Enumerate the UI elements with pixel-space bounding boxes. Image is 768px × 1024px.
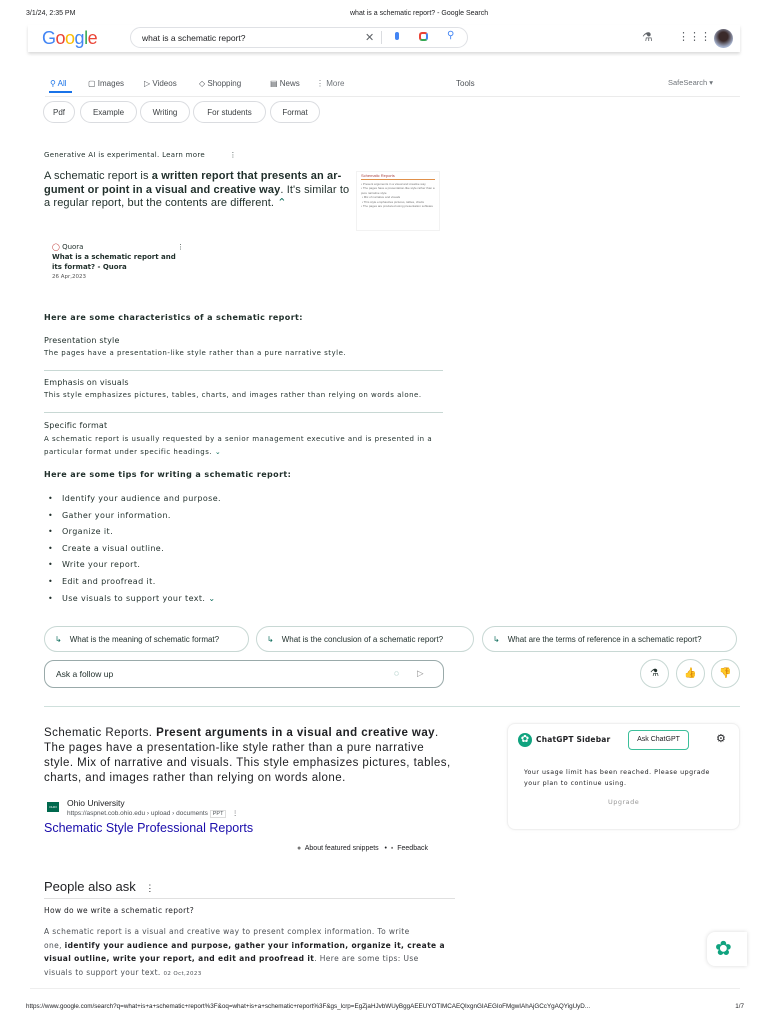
filter chips: For students xyxy=(207,108,252,116)
featured snippet text xyxy=(44,727,451,784)
thumbnail slide: • Mix of narrative and visuals xyxy=(362,195,400,199)
filter chips: Example xyxy=(93,108,124,116)
icons: labs, apps, avatar xyxy=(642,29,733,48)
AI overview summary: gument or point in a visual and creative way. It's similar to xyxy=(44,184,349,196)
characteristic: emphasis on visuals xyxy=(44,378,422,399)
featured snippet text: charts, and images rather than relying on words alone. xyxy=(44,772,346,784)
tips list: • Edit and proofread it. xyxy=(48,577,156,586)
print header xyxy=(26,10,488,17)
tabs: ⋮ More xyxy=(316,79,344,88)
filter chips: Format xyxy=(282,108,308,116)
answer xyxy=(44,927,445,976)
search box: ✕ xyxy=(365,32,374,44)
source card: quora: What is a schematic report and xyxy=(52,253,176,261)
search header bar xyxy=(28,25,740,52)
characteristic: presentation style xyxy=(44,336,346,357)
tips list: • Create a visual outline. xyxy=(48,544,164,553)
chatgpt sidebar panel: Your usage limit has been reached. Please upgrade xyxy=(524,769,710,776)
google logo: Google xyxy=(42,28,97,48)
print footer url: https://www.google.com/search?q=what+is+a+schematic+report%3F&oq=what+is+a+schematic+report%3F&gs_lcrp=EgZjaHJvbWUyBggAEEUYOTIMCAEQIxgnGIAEGIoFMgwIAhAjGCcYgAQYigUyD... xyxy=(26,1003,590,1010)
characteristic: specific format: Specific format xyxy=(44,421,107,430)
chatgpt sidebar panel: Ask ChatGPT xyxy=(637,736,680,743)
follow-up questions: What are the terms of reference in a schematic report? xyxy=(508,634,702,644)
characteristics heading: Here are some characteristics of a schematic report: xyxy=(44,313,303,322)
ask follow-up input xyxy=(44,660,444,688)
follow-up questions: ↳ xyxy=(493,634,500,644)
ask follow-up input: Ask a follow up xyxy=(56,669,113,679)
chatgpt sidebar panel: Upgrade xyxy=(608,798,639,806)
source: ohio university: OHIO xyxy=(49,805,57,809)
chatgpt sidebar panel: your plan to continue using. xyxy=(524,780,626,786)
thumbnail slide: Schematic Reports xyxy=(361,173,395,178)
characteristic: emphasis on visuals: Emphasis on visuals xyxy=(44,378,129,387)
characteristic: presentation style: The pages have a presentation-like style rather than a pure narrative style. xyxy=(44,349,346,357)
thumbnail slide: • The pages are produced using presentation software xyxy=(361,204,433,208)
answer: visuals to support your text. 02 Oct,2023 xyxy=(44,968,202,976)
tabs: ⚲ All xyxy=(50,79,67,88)
source card: quora: 26 Apr,2023 xyxy=(52,274,86,280)
characteristic: presentation style: Presentation style xyxy=(44,336,120,345)
chatgpt sidebar panel: ⚙ xyxy=(716,733,726,745)
tabs xyxy=(49,78,713,93)
characteristic: emphasis on visuals: This style emphasizes pictures, tables, charts, and images rather than relying on words alone. xyxy=(44,391,422,399)
tips list: • Use visuals to support your text. ⌄ xyxy=(48,594,215,603)
source: ohio university: https://aspnet.cob.ohio.edu › upload › documents PPT ⋮ xyxy=(67,810,238,817)
AI overview summary: A schematic report is a written report that presents an ar- xyxy=(44,170,341,182)
about featured snippets: ● About featured snippets • ▪ Feedback xyxy=(297,845,428,852)
thumbnail slide: • Present arguments in a visual and creative way xyxy=(361,182,426,186)
feedback buttons: 👍 xyxy=(684,668,697,679)
source: ohio university: Ohio University xyxy=(67,798,125,808)
tips list: • Write your report. xyxy=(48,560,140,569)
search box: ⚲ xyxy=(447,30,454,41)
AI overview summary xyxy=(44,170,349,209)
follow-up questions: ↳ xyxy=(55,634,62,644)
tabs: Tools xyxy=(456,79,475,88)
chatgpt sidebar panel: ChatGPT Sidebar xyxy=(536,735,610,744)
people also ask heading: People also ask ⋮ xyxy=(44,879,154,894)
source card: quora xyxy=(52,243,184,280)
feedback buttons: ⚗ xyxy=(650,668,659,679)
tabs: ◇ Shopping xyxy=(199,79,241,88)
source card: quora: ⋮ xyxy=(177,243,184,251)
source card: quora: ◯ Quora xyxy=(52,243,83,251)
chatgpt sidebar panel: ✿ xyxy=(521,734,529,745)
print header: what is a schematic report? - Google Search xyxy=(350,10,488,17)
tabs: ▢ Images xyxy=(88,79,124,88)
icons: labs, apps, avatar: ⋮⋮⋮ xyxy=(678,31,711,43)
print header: 3/1/24, 2:35 PM xyxy=(26,10,75,17)
characteristic: specific format: A schematic report is usually requested by a senior management executive and is presented in a xyxy=(44,435,432,443)
answer: visual outline, write your report, and edit and proofread it. Here are some tips: Use xyxy=(44,954,419,963)
floating chatgpt icon xyxy=(707,932,747,966)
featured snippet text: The pages have a presentation-like style rather than a pure narrative xyxy=(44,742,424,754)
tips list: • Organize it. xyxy=(48,527,113,536)
answer: one, identify your audience and purpose, gather your information, organize it, create a xyxy=(44,940,445,950)
follow-up questions xyxy=(44,626,737,652)
tips list xyxy=(48,494,221,603)
answer: A schematic report is a visual and creative way to present complex information. To write xyxy=(44,927,410,936)
ask follow-up input: ◌ xyxy=(394,668,399,678)
follow-up questions: What is the conclusion of a schematic report? xyxy=(282,634,443,644)
thumbnail slide: • The pages have a presentation-like style rather than a pure narrative style xyxy=(361,186,435,194)
characteristic: specific format xyxy=(44,421,432,456)
thumbnail slide xyxy=(356,171,440,231)
print footer url: 1/7 xyxy=(735,1003,744,1010)
chatgpt sidebar panel xyxy=(507,723,740,830)
source: ohio university xyxy=(44,798,253,835)
source: ohio university: Schematic Style Professional Reports xyxy=(44,821,253,835)
tips heading: Here are some tips for writing a schematic report: xyxy=(44,470,291,479)
search box xyxy=(130,27,468,48)
featured snippet text: style. Mix of narrative and visuals. This style emphasizes pictures, tables, xyxy=(44,757,451,769)
tips list: • Identify your audience and purpose. xyxy=(48,494,221,503)
filter chips: Writing xyxy=(153,108,177,116)
filter chips: Pdf xyxy=(53,108,65,116)
search box: what is a schematic report? xyxy=(142,33,245,43)
source card: quora: its format? - Quora xyxy=(52,263,127,271)
thumbnail slide: • This style emphasizes pictures, tables, charts xyxy=(362,200,424,204)
featured snippet text: Schematic Reports. Present arguments in a visual and creative way. xyxy=(44,727,439,739)
tabs: ▤ News xyxy=(270,79,300,88)
tips list: • Gather your information. xyxy=(48,511,171,520)
floating chatgpt icon: ✿ xyxy=(715,938,732,960)
characteristic: specific format: particular format under specific headings. ⌄ xyxy=(44,448,221,456)
AI overview summary: a regular report, but the contents are different. ⌃ xyxy=(44,197,287,209)
feedback buttons: 👎 xyxy=(719,668,732,679)
follow-up questions: What is the meaning of schematic format? xyxy=(70,634,219,644)
AI notice: Generative AI is experimental. Learn more ⋮ xyxy=(44,151,237,159)
tabs: SafeSearch ▾ xyxy=(668,78,713,87)
follow-up questions: ↳ xyxy=(267,634,274,644)
icons: labs, apps, avatar: ⚗ xyxy=(642,30,653,44)
filter chips xyxy=(43,101,320,123)
question: How do we write a schematic report? xyxy=(44,906,194,915)
ask follow-up input: ▷ xyxy=(417,668,424,678)
tabs: ▷ Videos xyxy=(144,79,177,88)
feedback buttons xyxy=(640,659,740,688)
